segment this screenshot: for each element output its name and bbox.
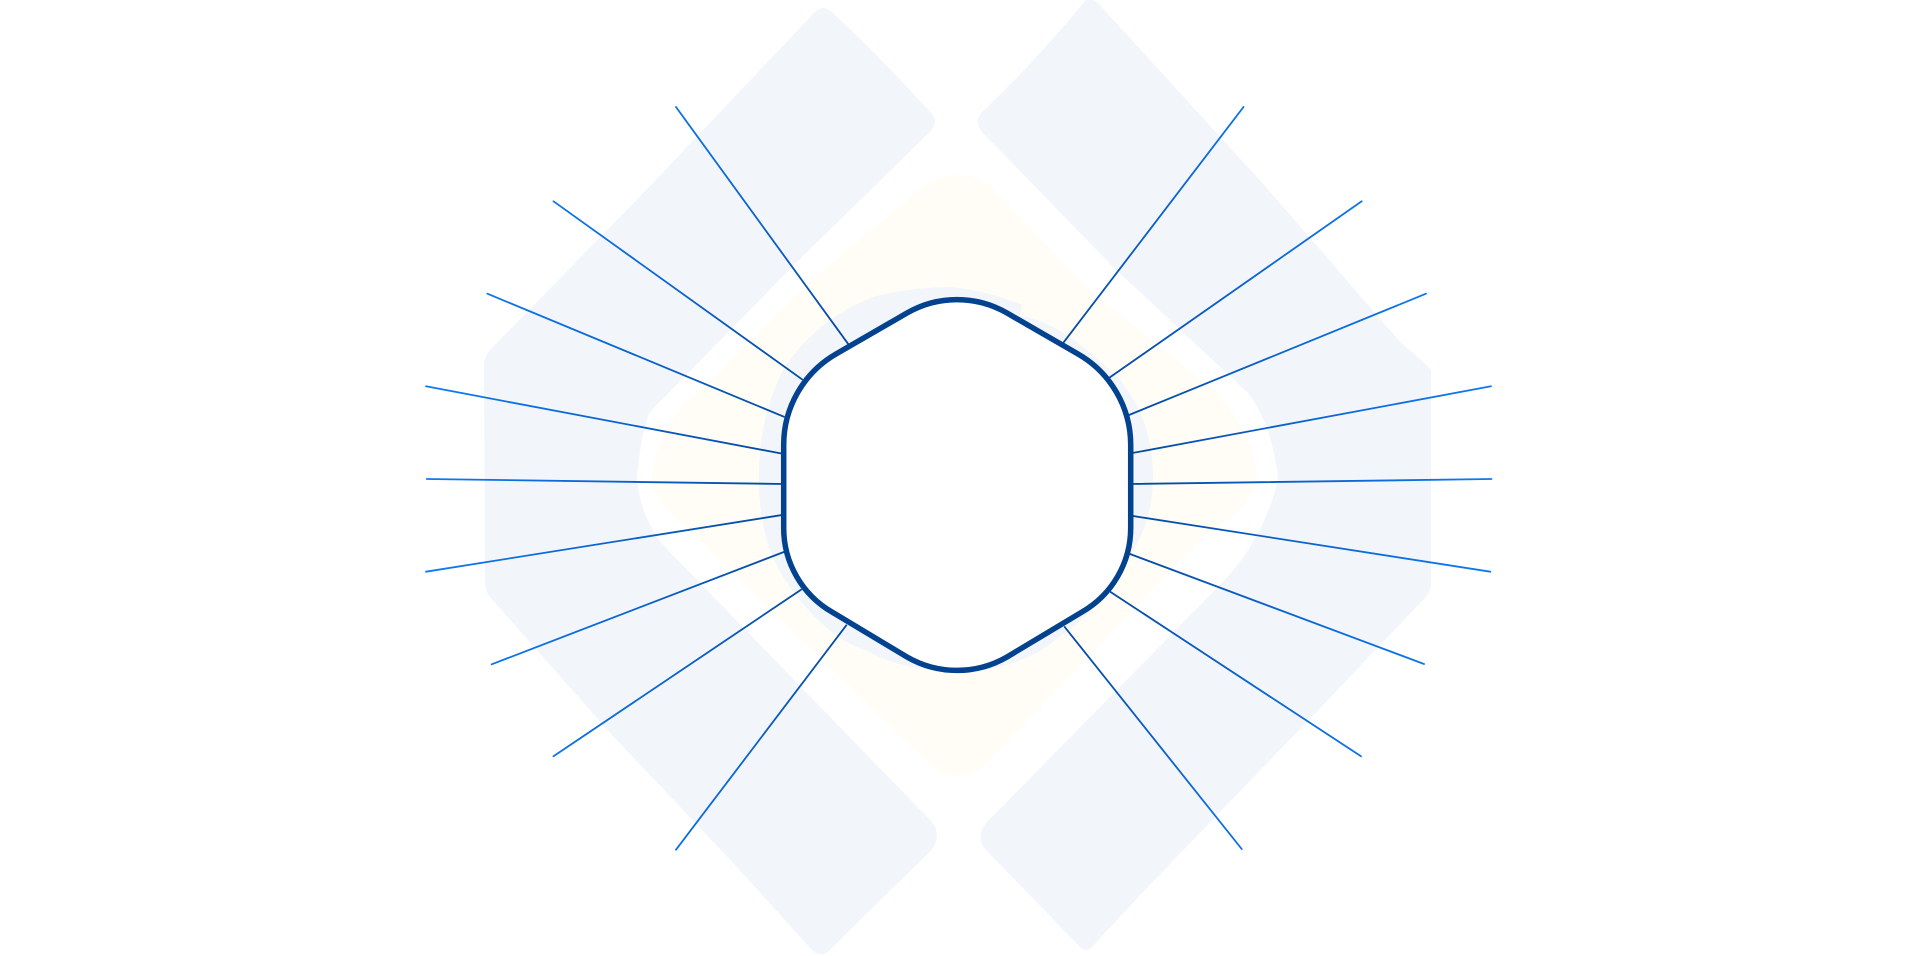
ray lines [426, 107, 1492, 850]
ray: left 4 [426, 386, 784, 454]
ray: left 7 [492, 552, 784, 664]
ray: left 6 [426, 515, 784, 572]
ray: right 8 [1111, 592, 1361, 756]
ray: right 9 [1065, 627, 1242, 849]
background: right blue chevron [978, 0, 1431, 950]
ray: left 3 [487, 294, 784, 417]
ray: right 7 [1130, 554, 1424, 664]
ray: right 3 [1129, 294, 1426, 415]
background: left blue chevron [484, 8, 937, 955]
background: yellow rounded diamond [652, 175, 1257, 776]
background: inner blue blob [759, 287, 1153, 672]
ray: left 9 [676, 625, 846, 850]
central hexagon [784, 300, 1131, 670]
ray: right 2 [1110, 201, 1362, 377]
ray: right 1 [1063, 107, 1244, 343]
ray: left 5 [427, 479, 784, 484]
ray: right 4 [1131, 386, 1491, 453]
ray: left 8 [554, 590, 801, 756]
ray: right 5 [1131, 479, 1492, 484]
ray: right 6 [1131, 516, 1490, 572]
ray: left 1 [676, 107, 849, 345]
ray: left 2 [554, 201, 802, 379]
